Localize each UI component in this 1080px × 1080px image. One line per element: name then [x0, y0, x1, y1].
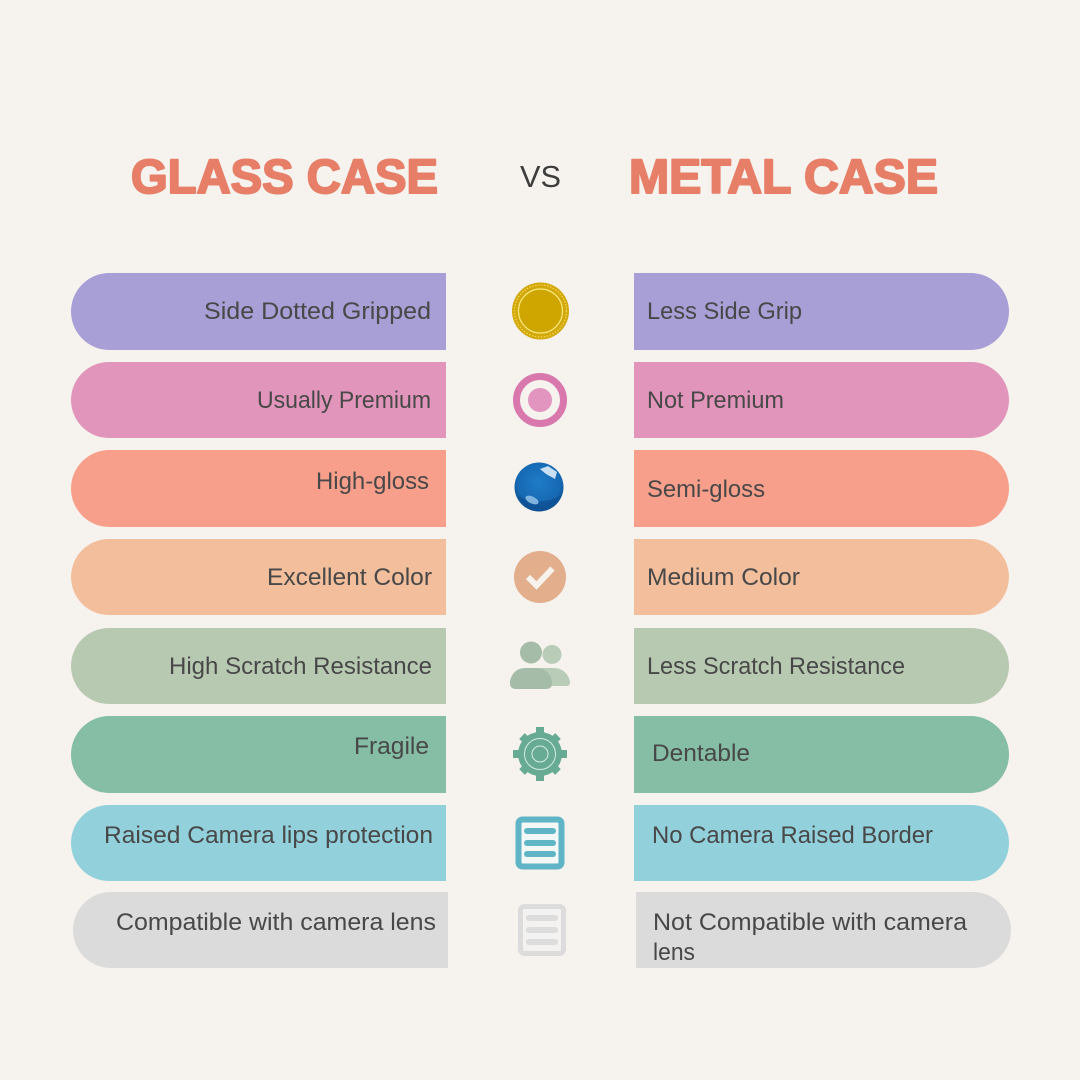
icon: two people [510, 642, 570, 689]
left pill: raised camera lips protection: Raised Camera lips protection [104, 822, 433, 849]
left pill: high-gloss [71, 450, 446, 527]
right pill: dentable [634, 716, 1009, 793]
right pill: dentable: Dentable [652, 740, 750, 767]
left pill: fragile [71, 716, 446, 793]
title: glass case: GLASS CASE [131, 151, 438, 204]
left pill: excellent color [71, 539, 446, 615]
row 4: color [71, 539, 1009, 615]
left pill: fragile: Fragile [354, 733, 429, 760]
icon: gold coin [512, 282, 569, 340]
icon: target ring [516, 376, 564, 424]
row 8: lens compatibility [73, 892, 1011, 968]
right pill: less side grip: Less Side Grip [647, 298, 802, 325]
vs label: VS [520, 159, 561, 194]
right pill: no camera raised border [634, 805, 1009, 881]
row 7: camera lips [71, 805, 1009, 881]
left pill: excellent color: Excellent Color [267, 564, 432, 591]
right pill: not premium: Not Premium [647, 387, 784, 414]
right pill: not compatible with camera lens: lens [653, 939, 695, 966]
right pill: not compatible with camera lens: Not Compatible with camera [653, 909, 968, 936]
left pill: side dotted gripped: Side Dotted Gripped [204, 298, 431, 325]
left pill: side dotted gripped [71, 273, 446, 350]
right pill: medium color [634, 539, 1009, 615]
icon: list card grey [520, 906, 564, 954]
right pill: less scratch resistance: Less Scratch Resistance [647, 653, 905, 680]
row 5: scratch [71, 628, 1009, 704]
title: metal case: METAL CASE [629, 151, 938, 204]
row 3: gloss [71, 450, 1009, 527]
right pill: not compatible with camera lens [636, 892, 1011, 968]
right pill: semi-gloss [634, 450, 1009, 527]
left pill: high scratch resistance: High Scratch Resistance [169, 653, 432, 680]
icon: check badge [514, 551, 566, 603]
left pill: compatible with camera lens [73, 892, 448, 968]
row 2: premium [71, 362, 1009, 438]
right pill: less scratch resistance [634, 628, 1009, 704]
left pill: usually premium [71, 362, 446, 438]
left pill: compatible with camera lens: Compatible with camera lens [116, 909, 436, 936]
right pill: semi-gloss: Semi-gloss [647, 476, 765, 503]
left pill: high-gloss: High-gloss [316, 468, 429, 495]
left pill: usually premium: Usually Premium [257, 387, 431, 414]
left pill: raised camera lips protection [71, 805, 446, 881]
right pill: less side grip [634, 273, 1009, 350]
row 1: grip [71, 273, 1009, 350]
icon: gear [513, 727, 567, 781]
left pill: high scratch resistance [71, 628, 446, 704]
right pill: not premium [634, 362, 1009, 438]
right pill: no camera raised border: No Camera Raised Border [652, 822, 933, 849]
icon: blue glass ball [514, 462, 564, 512]
icon: list card teal [518, 820, 562, 866]
row 6: durability [71, 716, 1009, 793]
right pill: medium color: Medium Color [647, 564, 800, 591]
